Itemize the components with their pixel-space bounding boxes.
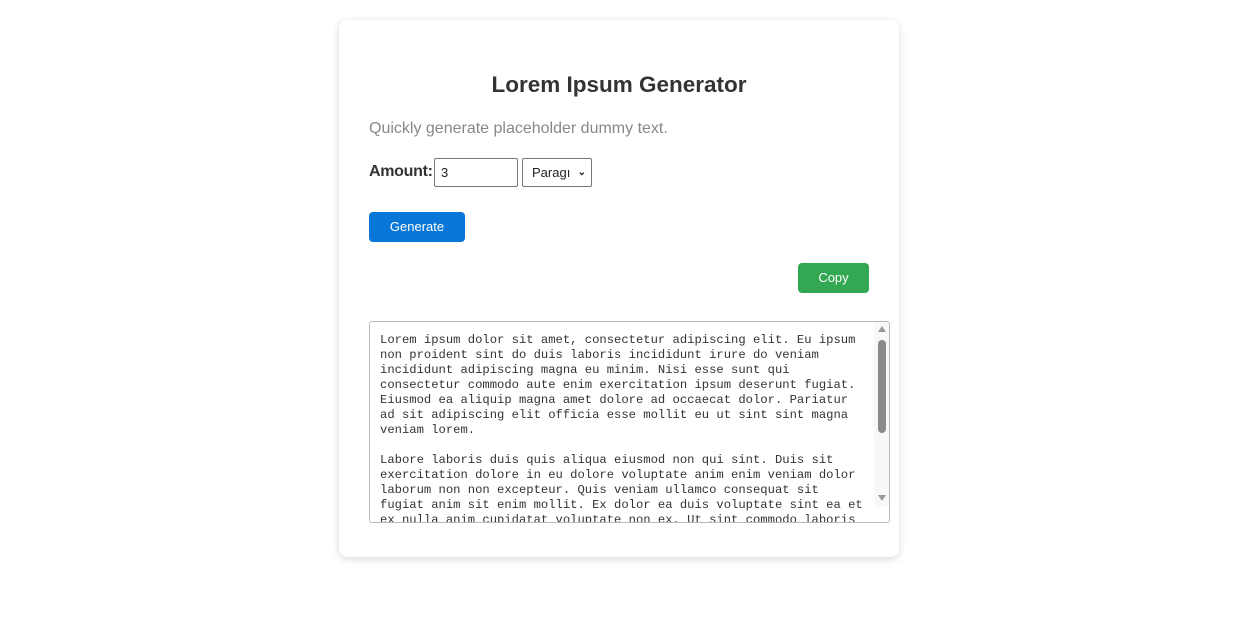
amount input (434, 158, 518, 187)
amount input: 3 (441, 165, 448, 180)
unit select: ⌄ (578, 167, 586, 178)
scrollbar (874, 322, 889, 507)
amount label: Amount: (369, 163, 433, 180)
output textarea: Lorem ipsum dolor sit amet, consectetur adipiscing elit. Eu ipsum non proident sint do duis laboris incididunt irure do veniam incididunt adipiscing magna eu minim. Nisi esse sunt qui consectetur commodo aute enim exercitation ipsum deserunt fugiat. Eiusmod ea aliquip magna amet dolore ad occaecat dolor. Pariatur ad sit adipiscing elit officia esse mollit eu ut sint sint magna veniam lorem. Labore laboris duis quis aliqua eiusmod non qui sint. Duis sit exercitation dolore in eu dolore voluptate anim enim veniam dolor laborum non non excepteur. Quis veniam ullamco consequat sit fugiat anim sit enim mollit. Ex dolor ea duis voluptate sint ea et ex nulla anim cupidatat voluptate non ex. Ut sint commodo laboris (380, 333, 863, 523)
panel: card (339, 20, 899, 557)
unit select: Paragı (532, 165, 570, 180)
generate button (369, 212, 465, 242)
copy button (798, 263, 869, 293)
title: Lorem Ipsum Generator (491, 72, 747, 97)
subtitle: Quickly generate placeholder dummy text. (369, 120, 668, 137)
copy button: Copy (818, 270, 849, 285)
generate button: Generate (390, 219, 444, 234)
unit select (522, 158, 592, 187)
